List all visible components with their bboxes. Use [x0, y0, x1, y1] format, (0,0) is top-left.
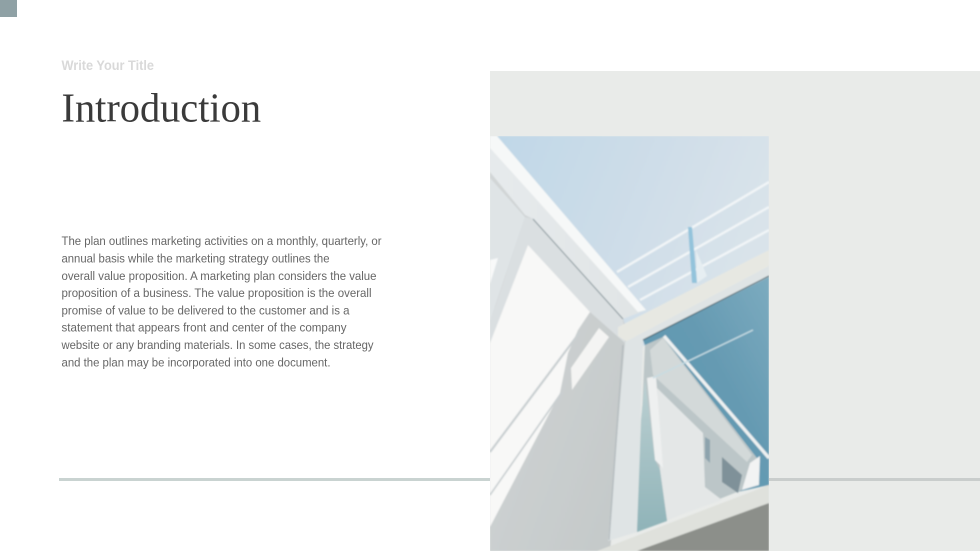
body paragraph: and the plan may be incorporated into one document. — [62, 355, 330, 369]
interior picture frame — [722, 457, 742, 493]
balcony railing — [617, 182, 769, 300]
interior beam — [664, 336, 769, 458]
frame groove — [609, 345, 623, 540]
sunlit wall area — [490, 245, 590, 527]
beam shadow crease — [533, 219, 623, 319]
balcony ledge — [618, 250, 769, 342]
light wall strip — [490, 217, 625, 343]
sky — [490, 136, 769, 346]
railing post — [688, 227, 697, 283]
white pipe — [742, 456, 760, 490]
interior white panel — [657, 388, 722, 520]
body paragraph: statement that appears front and center of the company — [62, 321, 347, 335]
body paragraph: proposition of a business. The value proposition is the overall — [62, 286, 372, 300]
wall window glint — [490, 258, 498, 284]
grey background panel — [490, 71, 980, 551]
horizontal rule left — [59, 478, 490, 481]
horizontal rule right — [769, 478, 980, 481]
interior ceiling — [650, 338, 752, 462]
ledge underside — [637, 503, 769, 551]
upper left wall panel — [490, 178, 525, 322]
sunlit wall sliver — [571, 328, 609, 390]
reflected rail — [653, 330, 753, 378]
white reflection streak — [647, 376, 663, 468]
roof beam highlight — [490, 136, 646, 312]
window interior — [642, 336, 758, 499]
corner square accent — [0, 0, 17, 17]
glass top edge — [643, 276, 769, 340]
body paragraph: promise of value to be delivered to the customer and is a — [62, 303, 350, 317]
title: Introduction — [62, 84, 261, 130]
body paragraph: The plan outlines marketing activities on a monthly, quarterly, or — [62, 234, 382, 248]
concrete wall base — [490, 170, 630, 551]
body paragraph: overall value proposition. A marketing plan considers the value — [62, 269, 377, 283]
window frame — [608, 306, 699, 541]
body paragraph: annual basis while the marketing strategy outlines the — [62, 251, 330, 265]
roof beam — [490, 148, 638, 318]
bottom ledge — [597, 485, 769, 551]
railing shadows on wall — [490, 332, 580, 495]
teal glass strip — [636, 406, 668, 532]
body paragraph: website or any branding materials. In some cases, the strategy — [61, 338, 374, 352]
blue glass — [643, 277, 769, 500]
photo: modern white building and window against sky — [490, 136, 769, 551]
post shadow wedge — [696, 252, 706, 282]
subtitle: Write Your Title — [62, 58, 154, 73]
interior wall sign — [705, 437, 710, 463]
body paragraph — [61, 234, 381, 369]
